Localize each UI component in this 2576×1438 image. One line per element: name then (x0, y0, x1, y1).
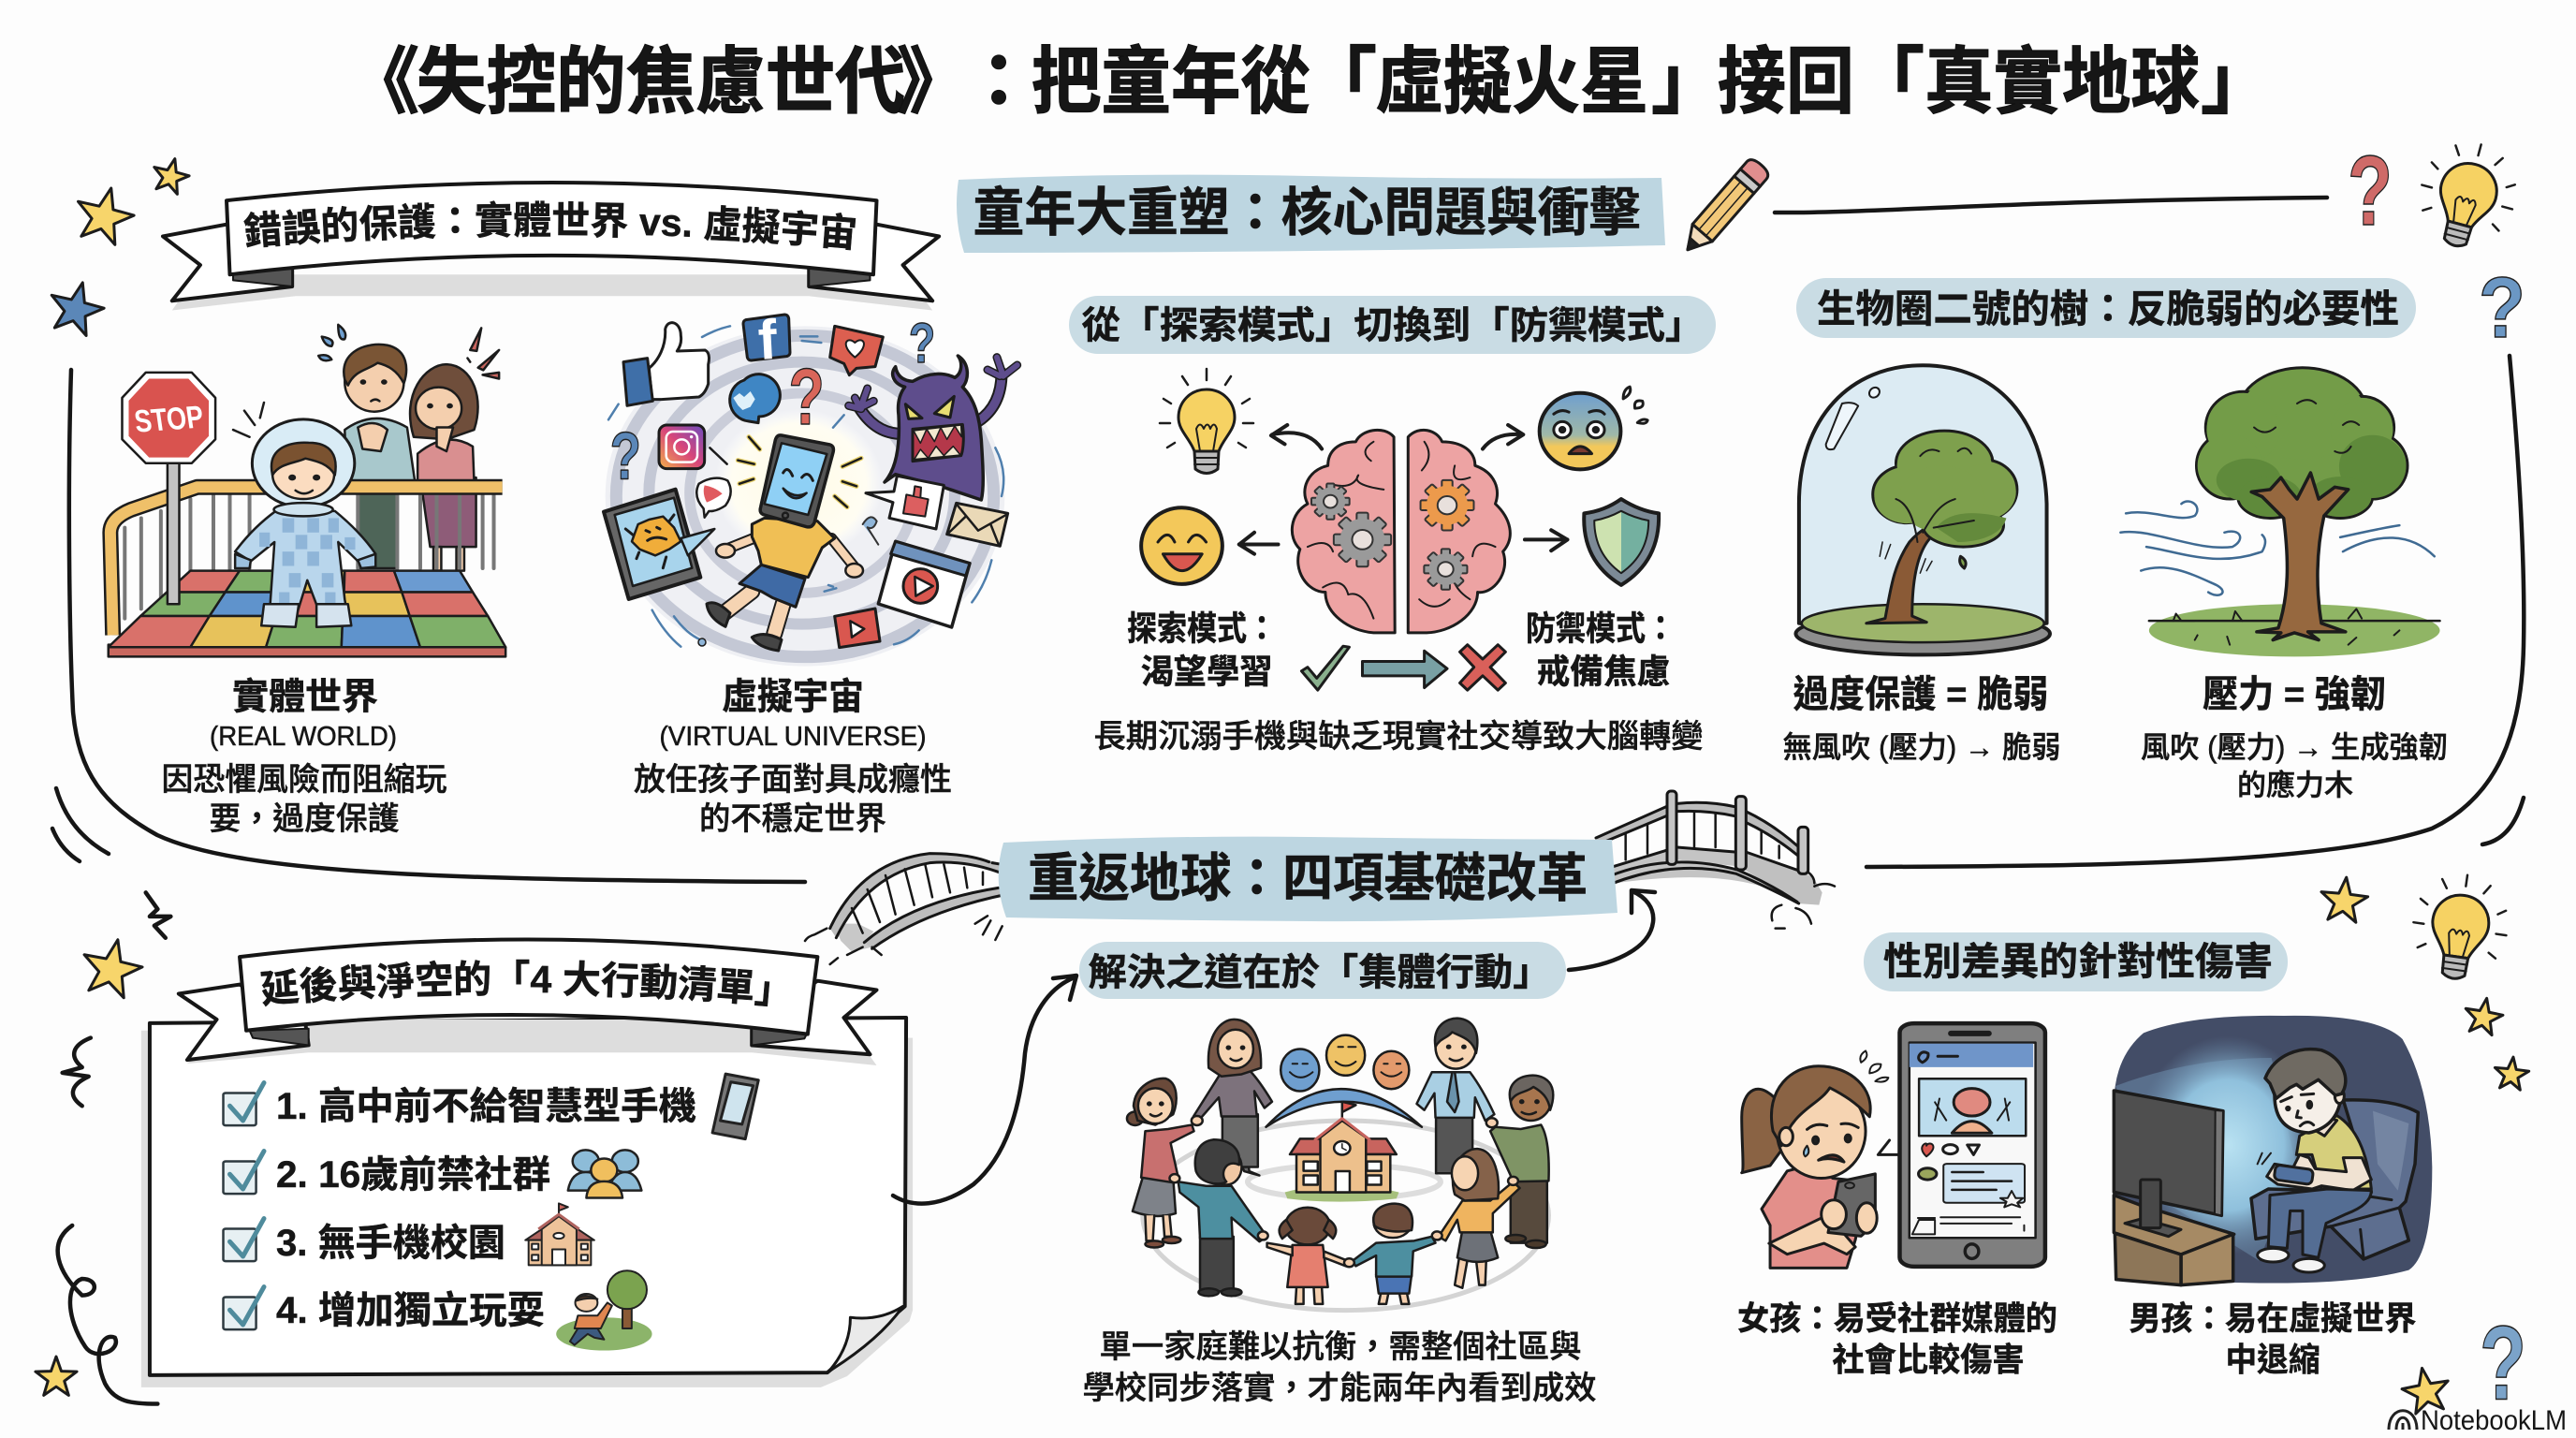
pill heading (1864, 932, 2288, 991)
captions: 社會比較傷害 (1833, 1343, 2024, 1378)
panel: biosphere tree (1782, 278, 2448, 801)
caption: 單一家庭難以抗衡，需整個社區與 (1099, 1329, 1582, 1365)
bridge left of header (805, 854, 1008, 964)
banner heading: 錯誤的保護：實體世界 vs. 虛擬宇宙 (243, 200, 856, 251)
title: 失控的焦慮世代 (417, 40, 905, 123)
pill heading: 解決之道在於「集體行動」 (1088, 952, 1552, 993)
small heart bubble (696, 478, 731, 518)
item 1 (224, 1074, 758, 1139)
illustration: tree under glass dome (1795, 365, 2050, 654)
pill heading: 從「探索模式」切換到「防禦模式」 (1082, 305, 1704, 346)
captions: 中退縮 (2226, 1343, 2320, 1378)
frame: top rule (1775, 198, 2327, 213)
question mark red: ? (2348, 136, 2393, 246)
tablet (604, 490, 700, 599)
kid limbs (723, 538, 754, 550)
instagram (659, 425, 705, 469)
title: 《 (346, 40, 419, 123)
question mark blue: ? (2479, 260, 2525, 356)
labels: fragile vs strong (1782, 674, 2448, 801)
pill heading (1079, 942, 1566, 999)
title: 「 (1304, 40, 1377, 123)
envelope (947, 503, 1008, 546)
motion strokes left (52, 788, 109, 861)
lock card (866, 476, 944, 529)
item 2: 2. 16歲前禁社群 (276, 1154, 550, 1196)
labels: fragile vs strong: 風吹 (壓力) → 生成強韌 (2141, 730, 2448, 764)
title: 》 (897, 40, 970, 123)
title: 「 (1852, 40, 1925, 123)
pencil icon (1677, 156, 1771, 258)
frame: upper section outline right (1866, 356, 2524, 867)
pill heading (1796, 278, 2416, 338)
paper with curled corner (141, 1018, 913, 1387)
blue bubble (730, 374, 780, 423)
captions: 男孩：易在虛擬世界 (2129, 1301, 2417, 1337)
label: real world (161, 678, 447, 837)
red play square (835, 609, 880, 648)
illustration: boy gaming in dark room (2114, 1016, 2432, 1285)
mode labels: 戒備焦慮 (1537, 652, 1670, 691)
frame: upper section outline left (69, 370, 805, 882)
arrow: collective action to header (1569, 890, 1655, 970)
mode labels: 防禦模式： (1526, 609, 1676, 648)
item 2 (224, 1150, 641, 1198)
pill heading: 性別差異的針對性傷害 (1883, 940, 2273, 983)
captions (1737, 1301, 2417, 1378)
phone head (760, 435, 833, 527)
illustration: girl with social media phone (1742, 1023, 2045, 1268)
panel: gender differences (1737, 932, 2432, 1378)
illustration: virtual universe whirlpool: ? (788, 353, 825, 442)
illustration: real world crib: STOP (132, 399, 206, 439)
motion strokes right (2482, 798, 2524, 844)
label: real world: 因恐懼風險而阻縮玩 (161, 762, 447, 798)
light bulb lower right (2407, 869, 2514, 985)
person C (1133, 1178, 1176, 1216)
brand: NotebookLM: NotebookLM (2421, 1405, 2567, 1436)
mode labels: 探索模式： (1127, 609, 1277, 648)
title: 接回 (1718, 40, 1854, 123)
label: virtual universe (634, 678, 952, 837)
person A (1222, 1114, 1259, 1176)
label: real world: (REAL WORLD) (210, 722, 397, 752)
section header: back to earth (999, 837, 1617, 921)
caption (1082, 1329, 1597, 1406)
left margin doodles (58, 892, 170, 1404)
illustration: strong tree in wind (2120, 368, 2440, 656)
icon: school (525, 1203, 594, 1265)
item 4: 4. 增加獨立玩耍 (276, 1290, 545, 1331)
person G (1295, 1287, 1323, 1304)
arrow: checklist to collective action (893, 976, 1076, 1204)
person E (1200, 1237, 1234, 1291)
video window (878, 541, 970, 627)
person H (1379, 1291, 1409, 1304)
title: 虛擬火星 (1375, 40, 1648, 123)
labels: fragile vs strong: 壓力 = 強韌 (2203, 674, 2386, 715)
item 3 (224, 1203, 594, 1265)
illustration: virtual universe whirlpool: ? (610, 418, 641, 493)
light bulb top right (2408, 133, 2526, 257)
monster (858, 405, 899, 433)
panel: wrong protection (102, 177, 1024, 837)
thumb (649, 323, 709, 400)
illustration: real world crib (109, 325, 505, 656)
person F (1455, 1260, 1486, 1288)
panel: explore to defend mode (1069, 296, 1716, 755)
item 4 (224, 1270, 652, 1351)
bridge right of header (1596, 791, 1835, 929)
fb (743, 315, 790, 360)
icon: phone (712, 1074, 758, 1139)
section header: back to earth: 重返地球：四項基礎改革 (1028, 848, 1588, 908)
captions: 女孩：易受社群媒體的 (1737, 1301, 2057, 1337)
light bulb: learning (1160, 369, 1253, 474)
panel: action checklist (140, 938, 913, 1387)
person B (1436, 1114, 1472, 1173)
item 1: 1. 高中前不給智慧型手機 (276, 1086, 696, 1127)
person D (1511, 1180, 1547, 1243)
pill heading: 生物圈二號的樹：反脆弱的必要性 (1817, 287, 2399, 330)
illustration: virtual universe whirlpool: ? (909, 312, 935, 374)
title (346, 40, 2274, 123)
panel: collective action (1079, 942, 1597, 1406)
label: real world: 實體世界 (232, 678, 378, 717)
label: virtual universe: 放任孩子面對具成癮性 (634, 762, 952, 798)
section header: core problem: 童年大重塑：核心問題與衝擊 (973, 183, 1640, 242)
ribbon banner (163, 183, 939, 311)
label: virtual universe: (VIRTUAL UNIVERSE) (659, 722, 927, 752)
checklist items (224, 1074, 758, 1351)
pill heading (1069, 296, 1716, 354)
item 3: 3. 無手機校園 (276, 1223, 505, 1264)
icon: people (568, 1150, 641, 1198)
title: 真實地球 (1925, 40, 2200, 123)
icon: child and tree (556, 1270, 652, 1351)
banner heading: 延後與淨空的「4 大行動清單」 (260, 959, 769, 1007)
label: virtual universe: 的不穩定世界 (699, 801, 886, 837)
heart bubble (830, 326, 883, 375)
illustration: virtual universe whirlpool (604, 308, 1017, 667)
brain with gears and icons (1141, 387, 1659, 690)
label: virtual universe: 虛擬宇宙 (722, 678, 864, 717)
mode labels (1127, 609, 1676, 691)
labels: fragile vs strong: 無風吹 (壓力) → 脆弱 (1782, 730, 2061, 764)
caption: 學校同步落實，才能兩年內看到成效 (1082, 1371, 1597, 1406)
illustration: virtual universe whirlpool: f (756, 308, 780, 372)
question mark blue lower right: ? (2480, 1305, 2526, 1421)
illustration: community circle around school (1127, 1019, 1553, 1311)
title: 」 (2201, 40, 2274, 123)
caption: 長期沉溺手機與缺乏現實社交導致大腦轉變 (1093, 719, 1704, 755)
label: real world: 要，過度保護 (210, 801, 399, 837)
title: ： (962, 40, 1035, 123)
labels: fragile vs strong: 過度保護 = 脆弱 (1793, 674, 2048, 715)
ribbon banner (179, 939, 877, 1065)
title: 把童年從 (1032, 40, 1310, 123)
title: 」 (1651, 40, 1724, 123)
labels: fragile vs strong: 的應力木 (2237, 770, 2353, 801)
mode labels: 渴望學習 (1140, 652, 1273, 691)
